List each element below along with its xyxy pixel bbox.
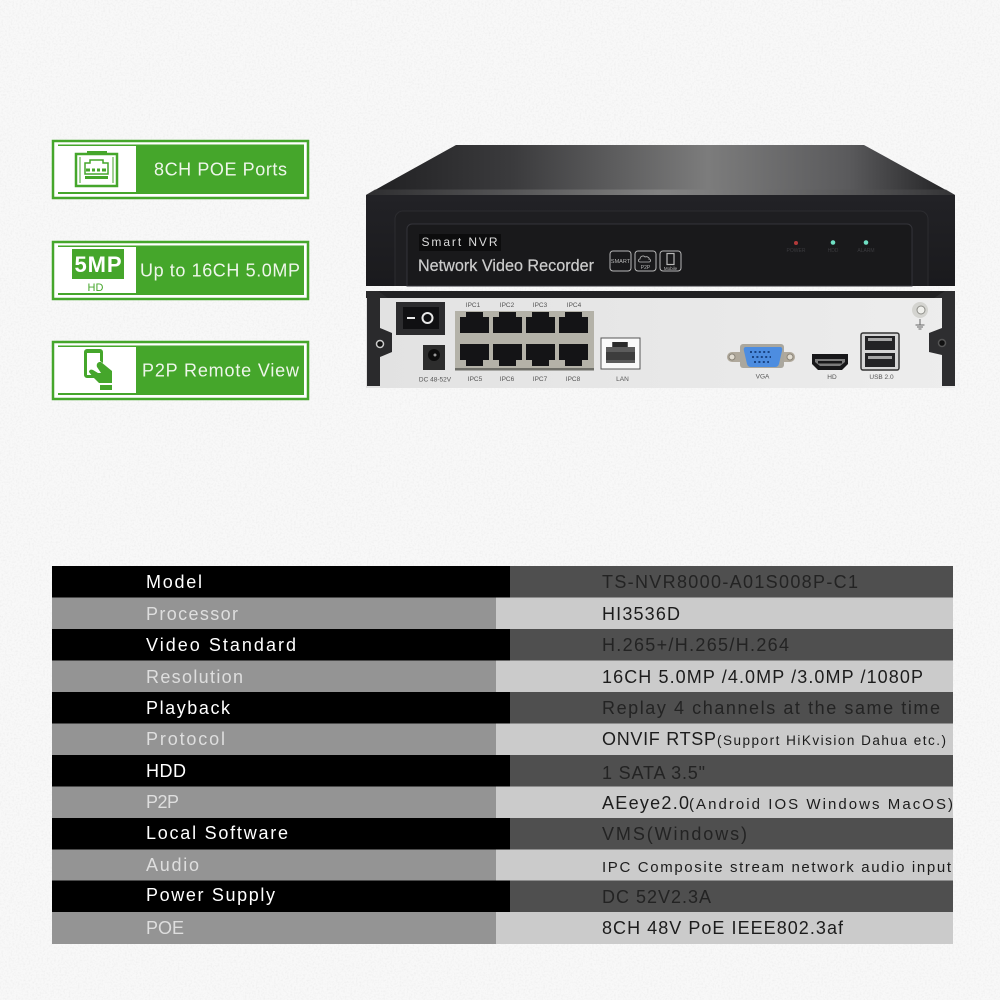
left bracket xyxy=(366,291,392,386)
label: DC 48-52V: DC 48-52V xyxy=(419,376,452,384)
status LEDs: HDD xyxy=(828,248,839,254)
PoE port labels: IPC4 xyxy=(567,302,582,309)
label: VGA: VGA xyxy=(756,374,770,380)
row values: Replay 4 channels at the same time xyxy=(602,698,940,718)
row values: 8CH 48V PoE IEEE802.3af xyxy=(602,918,844,938)
NVR front view xyxy=(366,145,955,286)
row labels xyxy=(146,572,296,938)
icon: hand holding phone xyxy=(84,349,112,390)
label: HD: HD xyxy=(827,374,837,381)
power switch xyxy=(396,302,445,335)
Network Video Recorder label: Network Video Recorder xyxy=(418,257,594,275)
row values: (Android IOS Windows MacOS) xyxy=(689,796,953,813)
row labels: Audio xyxy=(146,855,199,875)
icon: P2P cloud xyxy=(635,251,656,271)
top lid xyxy=(366,145,955,195)
badge label: Up to 16CH 5.0MP xyxy=(140,260,300,280)
row labels: Playback xyxy=(146,698,231,718)
status LEDs: ALARM xyxy=(857,248,875,254)
row values: H.265+/H.265/H.264 xyxy=(602,635,789,655)
icon: 5MP HD xyxy=(72,249,124,294)
right bracket xyxy=(929,291,955,386)
row labels: HDD xyxy=(146,761,186,781)
row values: DC 52V2.3A xyxy=(602,887,711,907)
USB ports xyxy=(861,333,899,370)
badge label: 8CH POE Ports xyxy=(154,160,287,180)
row values: VMS(Windows) xyxy=(602,824,747,844)
icon: Mobile: Mobile xyxy=(664,266,678,271)
row values: HI3536D xyxy=(602,604,680,624)
icon: SMART: SMART xyxy=(611,259,631,265)
icon: Mobile xyxy=(660,251,681,271)
feature badge: P2P Remote View xyxy=(53,342,308,399)
icon: SMART xyxy=(610,251,631,271)
row labels: Processor xyxy=(146,604,238,624)
PoE port labels: IPC8 xyxy=(566,376,581,383)
left column row backgrounds xyxy=(52,566,510,944)
feature badge: 8CH POE Ports xyxy=(53,141,308,198)
right column row backgrounds xyxy=(496,566,953,944)
label: USB 2.0: USB 2.0 xyxy=(869,374,894,381)
icon: ethernet port xyxy=(76,151,117,186)
front face xyxy=(366,195,955,286)
ground screw xyxy=(912,302,928,329)
PoE port labels: IPC5 xyxy=(468,376,483,383)
PoE port labels: IPC7 xyxy=(533,376,548,383)
specification table xyxy=(52,566,953,944)
label: LAN: LAN xyxy=(616,376,629,383)
icon: 5MP HD: 5MP xyxy=(74,252,122,277)
PoE port labels: IPC2 xyxy=(500,302,515,309)
row values: ONVIF RTSP xyxy=(602,729,716,749)
row values xyxy=(602,572,953,938)
row labels: Local Software xyxy=(146,823,288,843)
PoE port labels xyxy=(466,302,582,383)
PoE port block xyxy=(455,311,594,370)
HDMI port xyxy=(812,354,848,370)
PoE port labels: IPC3 xyxy=(533,302,548,309)
row values: TS-NVR8000-A01S008P-C1 xyxy=(602,572,858,592)
icon: P2P cloud: P2P xyxy=(641,265,651,271)
NVR rear view xyxy=(366,291,955,388)
PoE port labels: IPC1 xyxy=(466,302,481,309)
rear panel xyxy=(366,291,955,388)
Smart NVR label: Smart NVR xyxy=(422,235,498,249)
row labels: Video Standard xyxy=(146,635,296,655)
power jack xyxy=(423,345,445,370)
status LEDs: POWER xyxy=(787,248,806,254)
LAN port xyxy=(601,338,640,369)
VGA port xyxy=(727,344,795,368)
PoE port labels: IPC6 xyxy=(500,376,515,383)
row values: AEeye2.0 xyxy=(602,793,689,813)
row values: 1 SATA 3.5" xyxy=(602,763,705,783)
status LEDs xyxy=(787,240,875,254)
icon: 5MP HD: HD xyxy=(88,282,103,294)
feature badge: Up to 16CH 5.0MP xyxy=(53,242,308,299)
row labels: POE xyxy=(146,918,184,938)
row values: IPC Composite stream network audio input xyxy=(602,859,952,876)
row labels: Resolution xyxy=(146,667,243,687)
row labels: Protocol xyxy=(146,729,225,749)
badge label: P2P Remote View xyxy=(142,360,300,380)
row labels: Power Supply xyxy=(146,885,275,905)
row labels: Model xyxy=(146,572,202,592)
row values: 16CH 5.0MP /4.0MP /3.0MP /1080P xyxy=(602,667,923,687)
row labels: P2P xyxy=(146,792,179,812)
row values: (Support HiKvision Dahua etc.) xyxy=(717,733,946,748)
